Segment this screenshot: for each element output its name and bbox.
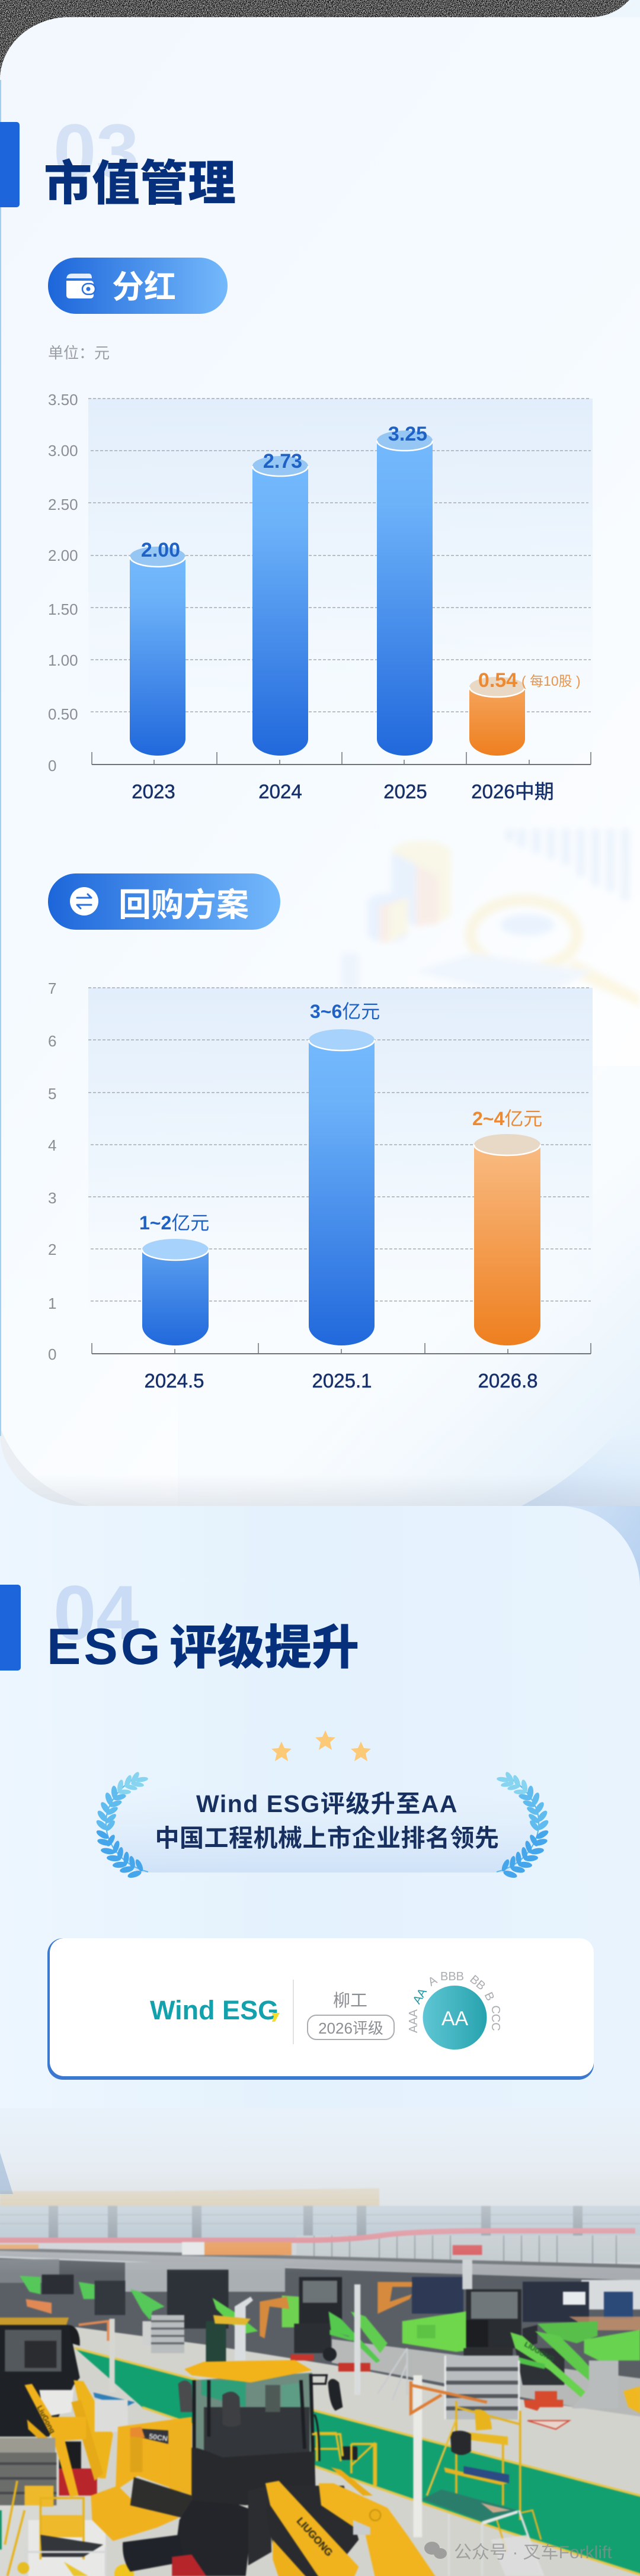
rating badge AA: A xyxy=(426,1974,440,1989)
red stripe xyxy=(0,2231,635,2240)
heading: ESG评级提升: 评级提升 xyxy=(169,1621,359,1674)
faint blue edge accent xyxy=(0,2153,13,2194)
foreground loader 50CN: 50CN xyxy=(148,2432,168,2443)
y axis labels: 0 xyxy=(48,1345,56,1363)
y axis labels: 6 xyxy=(48,1032,56,1050)
bar: 2025 xyxy=(377,423,433,756)
y axis labels: 7 xyxy=(48,979,56,997)
blue backdrop behind panel corner xyxy=(551,1480,640,1593)
bar: 2024: 2.73 xyxy=(263,450,302,473)
award band with laurels xyxy=(95,1771,550,1879)
x axis labels: 2023 xyxy=(132,780,175,802)
left loader xyxy=(0,2318,135,2576)
bar: 2024.5 xyxy=(139,1212,209,1345)
bar chart: dividends xyxy=(48,391,593,802)
y axis labels: 3 xyxy=(48,1189,56,1207)
icon: right laurel xyxy=(497,1771,550,1879)
green floor lane xyxy=(75,2348,640,2576)
bar chart: buyback plans xyxy=(48,979,593,1392)
far left machines xyxy=(20,2270,258,2392)
heading: ESG评级提升: ESG xyxy=(47,1618,164,1675)
watermark: 公众号 · 叉车Forklift xyxy=(454,2543,612,2562)
bar: 2023 xyxy=(130,539,185,756)
y axis labels: 1 xyxy=(48,1295,56,1312)
y axis labels: 2.50 xyxy=(48,496,78,513)
rating badge AA: AA xyxy=(441,2008,468,2030)
bar: 2025: 3.25 xyxy=(388,423,427,445)
x axis labels xyxy=(145,1370,537,1392)
rating badge AA: AA xyxy=(411,1986,430,2006)
x axis labels: 2024 xyxy=(258,780,302,802)
railing and walkway xyxy=(0,2235,640,2282)
company name and year badge: 2026评级 xyxy=(318,2019,383,2037)
icon: wallet xyxy=(66,274,95,298)
heading: 市值管理: 市值管理 xyxy=(44,158,236,211)
number watermark 04: 04 xyxy=(53,1569,139,1656)
rating badge AA: B xyxy=(482,1990,497,2003)
y axis labels: 2 xyxy=(48,1241,56,1258)
y axis labels: 0.50 xyxy=(48,705,78,723)
logo: Wind ESG: Wind ESG xyxy=(150,1995,279,2025)
award text xyxy=(155,1790,499,1852)
pill: 分红: 分红 xyxy=(112,269,176,305)
photo: factory assembly line xyxy=(0,2180,640,2576)
bar: 2024 xyxy=(252,450,308,756)
rating badge AA: CCC xyxy=(489,2005,502,2031)
company name and year badge: 柳工 xyxy=(333,1991,367,2010)
y axis labels xyxy=(48,391,78,775)
pill: 回购方案 xyxy=(48,873,280,930)
section 04 rounded corner xyxy=(0,1506,640,1777)
y axis labels xyxy=(48,979,56,1363)
bar: 2025.1: 3~6亿元 xyxy=(310,1001,380,1022)
pill: 回购方案: 回购方案 xyxy=(119,886,249,923)
right side machines xyxy=(260,2245,640,2429)
top asphalt photo strip xyxy=(0,0,629,80)
foreground loader 50CN: LIUGONG xyxy=(295,2515,335,2559)
award text: 中国工程机械上市企业排名领先 xyxy=(155,1825,499,1852)
icon: three stars xyxy=(271,1730,371,1761)
unit note: 单位：元 xyxy=(48,344,110,362)
x axis labels xyxy=(132,780,554,802)
y axis labels: 2.00 xyxy=(48,547,78,564)
number watermark 03: 03 xyxy=(53,108,139,194)
x axis labels: 2024.5 xyxy=(145,1370,204,1392)
y axis labels: 0 xyxy=(48,757,56,775)
x axis labels: 2025 xyxy=(383,780,427,802)
y axis labels: 1.50 xyxy=(48,600,78,618)
rating badge AA: BBB xyxy=(440,1970,464,1983)
bar: 2026.8: 2~4亿元 xyxy=(472,1108,542,1129)
y axis labels: 3.50 xyxy=(48,391,78,409)
company name and year badge xyxy=(308,1991,394,2039)
panel: section 03 xyxy=(0,0,640,1516)
decorative faded chart illustration xyxy=(341,829,640,1007)
bar: 2024.5: 1~2亿元 xyxy=(139,1212,209,1234)
factory floor xyxy=(0,2324,640,2576)
icon: left laurel xyxy=(95,1771,148,1879)
x axis labels: 2025.1 xyxy=(312,1370,372,1392)
section 04 panel background xyxy=(0,1362,640,2144)
icon: chat bubbles xyxy=(424,2542,447,2559)
y axis labels: 5 xyxy=(48,1085,56,1103)
section marker: 04 xyxy=(0,1585,21,1671)
y axis labels: 1.00 xyxy=(48,651,78,669)
foreground loader 50CN xyxy=(91,2360,376,2576)
award text: Wind ESG评级升至AA xyxy=(196,1790,458,1817)
icon: swap arrows xyxy=(70,887,98,916)
pill: 分红 xyxy=(48,258,228,314)
y axis labels: 4 xyxy=(48,1136,56,1154)
foreground rack and workbench xyxy=(314,2375,545,2576)
x axis labels: 2026.8 xyxy=(478,1370,537,1392)
bar: 2026 interim: ( 每10股 ) xyxy=(521,673,581,689)
bar: 2026 interim: 0.54 xyxy=(478,669,517,692)
y axis labels: 3.00 xyxy=(48,442,78,460)
right side machines: LIUGONG xyxy=(523,2340,556,2363)
bar: 2023: 2.00 xyxy=(141,539,180,561)
bar: 2025.1 xyxy=(309,1001,380,1345)
ceiling and upper wall xyxy=(0,2188,640,2238)
rating badge AA: AAA xyxy=(407,2009,420,2033)
far bay machinery backdrop xyxy=(0,2257,640,2422)
bar: 2026.8 xyxy=(472,1108,542,1345)
left loader: LiuGong xyxy=(36,2404,57,2434)
rating badge AA: BB xyxy=(468,1973,488,1993)
x axis labels: 2026中期 xyxy=(471,780,554,802)
orange banner xyxy=(0,2242,292,2255)
bar: 2026 interim xyxy=(469,669,581,756)
card: Wind ESG rating xyxy=(47,1938,594,2080)
misty fade over photo xyxy=(0,2108,640,2274)
rating badge AA xyxy=(407,1970,502,2050)
section marker: 03 xyxy=(0,122,20,207)
